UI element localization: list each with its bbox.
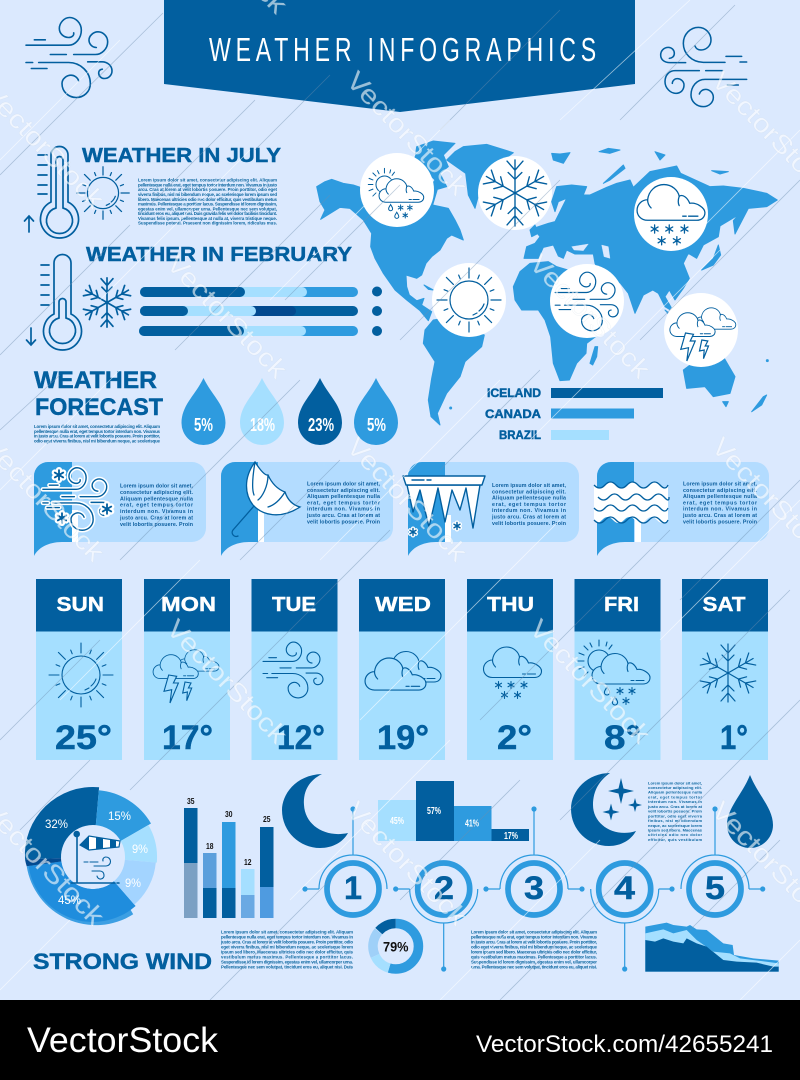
panel: icicles note — [403, 462, 579, 556]
text block: wind: Lorem ipsum dolor sit amet, consectetur adipiscing elit. Aliquam — [221, 929, 353, 934]
text: velit lobortis posuere. Proin — [492, 521, 566, 527]
text block: wind: eget viverra finibus, nisl mi bibendum neque, ac scelerisque lorem — [221, 944, 353, 949]
donut chart: strong wind — [25, 787, 157, 925]
forecast card: tuesday: 12° — [277, 719, 325, 757]
watermarks: VectorStock — [341, 65, 474, 202]
text block: wind: Suspendisse id lorem dignissim, egestas enim vel, ullamcorper urna. — [221, 959, 353, 964]
text: Lorem ipsum dolor sit amet, — [683, 482, 758, 488]
text: erat, eget tempus tortor — [683, 500, 757, 506]
text block: wind: vestibulum metus maximus. Pellentesque a porttitor lacus. — [221, 954, 353, 959]
watermarks: VectorStock — [524, 613, 657, 750]
icon: icicles — [403, 476, 485, 536]
donut chart: strong wind: 15% — [108, 809, 131, 823]
watermarks: VectorStock — [341, 431, 474, 568]
icon: wind top right — [661, 27, 747, 107]
text block: right: pellentesque nulla erat, eget tempus tortor interdum non. Vivamus — [471, 934, 598, 939]
forecast card: saturday: SAT — [702, 594, 746, 616]
icon: thermometer up — [24, 146, 78, 238]
icon: waves — [594, 482, 669, 523]
forecast card: saturday: 1° — [720, 719, 748, 757]
text block: moon: efficitur, quis vestibulum — [648, 837, 702, 842]
footer bar: VectorStock.com/42655241 — [476, 1031, 773, 1058]
bar chart: 35 — [187, 797, 195, 806]
icon: wind and snow — [43, 468, 111, 530]
step bar chart: 17% — [504, 831, 518, 842]
forecast card: friday — [574, 579, 660, 760]
step 4: 4 — [614, 870, 635, 906]
text block: wind: justo arcu. Cras at lorem at velit lobortis posuere. Proin porttitor, odio — [220, 939, 353, 944]
text: erat, eget tempus tortor — [492, 502, 566, 508]
panel: waves note — [594, 462, 769, 556]
text block: july: viverra finibus, nisl mi bibendum neque, ac scelerisque lorem ipsum sed — [138, 192, 277, 197]
bar chart — [184, 797, 274, 918]
text: velit lobortis posuere. Proin — [683, 519, 757, 525]
text block: july: maximus. Pellentesque a porttitor lacus. Suspendisse id lorem dignissim, — [138, 202, 277, 206]
text block: moon — [647, 780, 703, 842]
step 1: 1 — [344, 870, 362, 906]
text: Lorem ipsum dolor sit amet, — [120, 484, 194, 490]
text block: july: Vivamus felis ipsum, pellentesque at nulla at, viverra tristique neque. — [138, 216, 277, 221]
text block: right: in justo arcu. Cras at lorem at velit lobortis posuere. Proin porttitor, — [471, 939, 597, 944]
forecast card: thursday: THU — [487, 594, 534, 616]
step 3 — [483, 806, 585, 915]
text block: forecast: in justo arcu. Cras at lorem at velit lobortis posuere. Proin porttitor, — [34, 434, 160, 439]
text: consectetur adipiscing elit. — [307, 488, 381, 494]
text: interdum non. Vivamus in — [120, 509, 193, 515]
text block: forecast — [34, 424, 161, 443]
text block: july: libero. Maecenas ultricies odio nec dolor efficitur, quis vestibulum metus — [138, 197, 278, 202]
step 1 — [302, 806, 387, 915]
panel: umbrella note — [221, 462, 393, 556]
text: justo arcu. Cras at lorem at — [682, 513, 757, 519]
text block: moon: justo arcu. Cras at lorem at — [647, 804, 703, 809]
step bar chart: 41% — [465, 818, 479, 830]
water drops percentages: 18% — [250, 415, 275, 435]
country bars legend: CANADA — [485, 407, 541, 421]
text: consectetur adipiscing elit. — [683, 488, 758, 494]
bar chart: 12 — [244, 858, 252, 867]
small donut 79%: 79% — [383, 940, 408, 955]
text: justo arcu. Cras at lorem at — [491, 514, 566, 520]
donut chart: strong wind: 9% — [125, 876, 141, 890]
step bar chart: 57% — [427, 806, 441, 817]
forecast card: sunday — [36, 579, 122, 760]
world map — [317, 141, 777, 425]
text block: july: egestas enim vel, ullamcorper urna. Pellentesque nec sem volutpat, — [138, 206, 277, 211]
text block: forecast: pellentesque nulla erat, eget tempus tortor interdum non. Vivamus — [34, 429, 161, 434]
forecast card: friday: 8° — [604, 719, 641, 757]
text: consectetur adipiscing elit. — [120, 490, 194, 496]
text block: wind: pellentesque nulla erat, eget tempus tortor interdum non. Vivamus in — [221, 934, 353, 939]
numbered timeline — [302, 806, 765, 972]
text block: moon: erat, eget tempus tortor — [648, 794, 702, 800]
forecast card: friday: FRI — [604, 594, 639, 616]
step 3: 3 — [524, 870, 544, 906]
text block: moon: neque, ac scelerisque lorem — [648, 823, 702, 828]
text: Lorem ipsum dolor sit amet, — [307, 482, 381, 488]
heading: weather forecast: WEATHER — [34, 367, 157, 394]
water drops percentages: 5% — [367, 415, 386, 435]
small donut 79% — [364, 914, 428, 978]
step bar chart: 45% — [390, 816, 404, 827]
forecast card: thursday — [467, 579, 553, 760]
text: erat, eget tempus tortor — [307, 500, 380, 506]
forecast card: wednesday: 19° — [377, 719, 429, 757]
text block: wind — [220, 929, 354, 969]
step 5 — [681, 806, 765, 915]
icon: crescent moon — [282, 774, 348, 848]
text block: wind: ipsum sed libero. Maecenas ultricies odio nec dolor efficitur, quis — [221, 949, 354, 954]
forecast card: tuesday — [252, 579, 338, 760]
icon: wind top left — [26, 18, 112, 97]
text block: moon: interdum non. Vivamus in — [648, 799, 703, 804]
text — [682, 482, 758, 525]
text block: july: pellentesque nulla erat, eget tempus tortor interdum non. Vivamus in justo — [138, 182, 277, 188]
step 2: 2 — [434, 870, 454, 906]
text: erat, eget tempus tortor — [120, 503, 193, 509]
icon: big water drop — [727, 775, 773, 848]
map circle: snowflake — [478, 156, 552, 230]
text: velit lobortis posuere. Proin — [307, 519, 380, 525]
watermarks: VectorStock — [161, 248, 294, 385]
heading: weather in july: WEATHER IN JULY — [82, 145, 282, 167]
text — [491, 483, 567, 527]
text: Aliquam pellentesque nulla — [307, 494, 380, 500]
text block: moon: porttitor, odio eget viverra — [648, 813, 703, 818]
title: WEATHER INFOGRAPHICS — [209, 32, 596, 69]
text block: right: urna. Pellentesque nec sem volutpat, tincidunt eros eu, aliquet nisi. — [471, 964, 597, 969]
text: justo arcu. Cras at lorem at — [119, 516, 193, 522]
text: interdum non. Vivamus in — [683, 507, 757, 513]
forecast card: tuesday: TUE — [272, 594, 316, 616]
icon: sun july — [77, 167, 129, 219]
heading: weather in february: WEATHER IN FEBRUARY — [86, 244, 353, 266]
bar chart: 18 — [206, 842, 214, 851]
footer bar: VectorStock — [27, 1021, 219, 1060]
country bars legend: ICELAND — [487, 386, 541, 400]
forecast card: monday — [144, 579, 230, 760]
icon: windsock — [71, 831, 120, 883]
text block: moon: velit lobortis posuere. Proin — [648, 809, 703, 814]
map circle: storm — [664, 293, 738, 367]
map circle: wind — [550, 264, 624, 338]
step bar chart — [378, 781, 529, 842]
text: Aliquam pellentesque nulla — [683, 494, 757, 500]
icon: moon and stars — [571, 773, 642, 846]
text block: july: Lorem ipsum dolor sit amet, consectetur adipiscing elit. Aliquam — [138, 178, 277, 183]
donut chart: strong wind: 32% — [45, 817, 68, 831]
icon: broken umbrella — [232, 462, 300, 536]
map circle: snow cloud — [634, 177, 708, 251]
country bars legend: BRAZIL — [499, 428, 541, 442]
forecast card: monday: 17° — [162, 719, 213, 757]
forecast card: saturday — [682, 579, 768, 760]
text: Lorem ipsum dolor sit amet, — [492, 483, 567, 489]
text block: forecast: odio eget viverra finibus, nisl mi bibendum neque, ac scelerisque — [34, 438, 161, 443]
text block: right: quis vestibulum metus maximus. Pellentesque a porttitor lacus. — [471, 954, 597, 959]
water drops percentages: 23% — [308, 415, 334, 435]
country bars legend — [485, 386, 663, 442]
footer bar — [0, 1000, 800, 1080]
heading: weather forecast — [34, 367, 163, 421]
map circle: sun — [432, 263, 506, 337]
forecast card: sunday: SUN — [56, 594, 104, 616]
text — [119, 484, 194, 528]
text block: forecast: Lorem ipsum dolor sit amet, consectetur adipiscing elit. Aliquam — [34, 424, 160, 429]
forecast card: sunday: 25° — [55, 719, 112, 757]
text: justo arcu. Cras at lorem at — [306, 513, 380, 519]
heading: strong wind: STRONG WIND — [33, 949, 212, 974]
watermarks: VectorStock — [524, 248, 657, 385]
area chart — [645, 923, 779, 972]
text block: moon: finibus, nisl mi bibendum — [648, 818, 702, 823]
text block: right: Lorem ipsum dolor sit amet, consectetur adipiscing elit. Aliquam — [471, 929, 597, 934]
text block: moon: ultricies odio nec dolor — [648, 832, 702, 837]
text block: july — [138, 178, 278, 226]
text block: wind: Pellentesque nec sem volutpat, tincidunt eros eu, aliquet nisi. Duis — [221, 964, 354, 969]
text: Aliquam pellentesque nulla — [120, 496, 193, 502]
step 4 — [591, 863, 675, 972]
text: consectetur adipiscing elit. — [492, 489, 567, 495]
step 2 — [393, 863, 478, 972]
water drops percentages: 5% — [194, 415, 213, 435]
text: interdum non. Vivamus in — [492, 508, 566, 514]
text block: moon: ipsum sed libero. Maecenas — [648, 828, 703, 832]
text block: july: arcu. Cras at lorem at velit lobortis posuere. Proin porttitor, odio eget — [138, 187, 278, 192]
forecast card: thursday: 2° — [497, 719, 532, 757]
text: Aliquam pellentesque nulla — [492, 496, 566, 502]
panel: windy snow note — [34, 462, 206, 556]
text block: moon: consectetur adipiscing elit. — [648, 785, 702, 790]
water drops percentages — [182, 378, 398, 445]
text block: right: Suspendisse id lorem dignissim, egestas enim vel, ullamcorper — [471, 959, 597, 964]
forecast card: wednesday — [359, 579, 445, 760]
watermarks: VectorStock — [161, 613, 294, 750]
text: velit lobortis posuere. Proin — [120, 522, 193, 528]
february progress bars — [139, 286, 382, 336]
text block: moon: Lorem ipsum dolor sit amet, — [648, 780, 702, 785]
forecast card: wednesday: WED — [375, 594, 431, 616]
donut chart: strong wind: 9% — [132, 842, 148, 856]
text block: moon: Aliquam pellentesque nulla — [648, 790, 703, 795]
heading: weather forecast: FORECAST — [35, 394, 163, 421]
map circle: sun, cloud and sleet — [360, 153, 434, 227]
text block: july: Suspendisse potenti. Praesent non dignissim lorem, ridiculus mus. — [138, 221, 277, 226]
text block: right: odio eget viverra finibus, nisl mi bibendum neque, ac scelerisque — [471, 944, 598, 949]
text block: right: lorem ipsum sed libero. Maecenas ultricies odio nec dolor efficitur, — [471, 949, 597, 954]
forecast card: monday: MON — [161, 594, 216, 616]
step 5: 5 — [705, 870, 725, 906]
watermarks: VectorStock — [341, 795, 474, 932]
donut chart: strong wind: 45% — [58, 893, 81, 907]
icon: thermometer down — [26, 254, 82, 350]
text block: right — [471, 929, 598, 969]
bar chart: 25 — [263, 815, 271, 824]
text: interdum non. Vivamus in — [307, 507, 380, 513]
title banner — [164, 0, 635, 112]
text — [306, 482, 381, 525]
bar chart: 30 — [225, 810, 233, 819]
icon: snowflake february — [83, 278, 131, 327]
text block: july: tincidunt eros eu, aliquet nisi. Duis gravida felis vel dolor facilisis tincidunt. — [138, 211, 277, 216]
